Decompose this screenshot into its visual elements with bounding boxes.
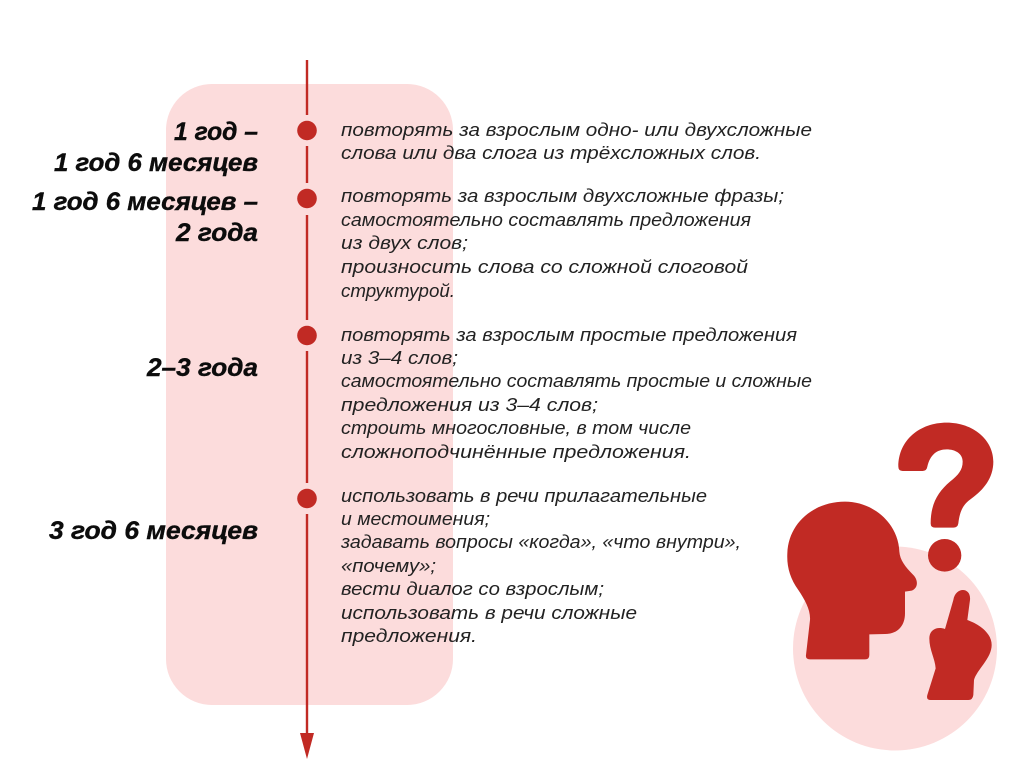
age label: 1 год 6 месяцев – 2 года: 2 года: [175, 219, 258, 247]
timeline markers: [297, 121, 317, 508]
age label: 2–3 года: 2–3 года: [146, 354, 258, 382]
text block: skills 2: произносить слова со сложной слоговой: [341, 256, 748, 277]
text block: skills 2: самостоятельно составлять предложения: [341, 209, 751, 230]
text block: skills 4: и местоимения;: [341, 508, 490, 529]
age label: 1 год 6 месяцев – 2 года: [32, 188, 258, 247]
age label: 1 год 6 месяцев – 2 года: 1 год 6 месяцев –: [32, 188, 258, 216]
text block: skills 3: сложноподчинённые предложения.: [341, 441, 691, 462]
text block: skills 2: структурой.: [341, 280, 455, 301]
icon: head with question mark and raised finger: [787, 423, 997, 750]
text block: skills 4: «почему»;: [341, 555, 436, 576]
text block: skills 3: строить многословные, в том числе: [341, 417, 691, 438]
age label: 1 год – 1 год 6 месяцев: 1 год 6 месяцев: [54, 149, 258, 177]
text block: skills 1: слова или два слога из трёхсложных слов.: [341, 142, 761, 163]
age label: 3 год 6 месяцев: 3 год 6 месяцев: [49, 517, 258, 545]
age label: 1 год – 1 год 6 месяцев: [54, 118, 258, 177]
text block: skills 3: [341, 324, 812, 462]
text block: skills 4: вести диалог со взрослым;: [341, 578, 604, 599]
text block: skills 4: [340, 485, 741, 646]
text block: skills 4: задавать вопросы «когда», «что внутри»,: [340, 531, 741, 552]
text block: skills 3: из 3–4 слов;: [341, 347, 458, 368]
panel: timeline background: [166, 84, 453, 705]
text block: skills 1: повторять за взрослым одно- или двухсложные: [341, 119, 812, 140]
text block: skills 4: использовать в речи прилагательные: [341, 485, 707, 506]
timeline arrow: [300, 60, 314, 759]
text block: skills 2: [341, 185, 784, 301]
text block: skills 3: повторять за взрослым простые предложения: [341, 324, 797, 345]
text block: skills 2: из двух слов;: [341, 232, 468, 253]
age label: 1 год – 1 год 6 месяцев: 1 год –: [174, 118, 258, 146]
text block: skills 1: [341, 119, 812, 163]
text block: skills 4: использовать в речи сложные: [341, 602, 637, 623]
text block: skills 3: предложения из 3–4 слов;: [341, 394, 598, 415]
text block: skills 4: предложения.: [341, 625, 477, 646]
text block: skills 2: повторять за взрослым двухсложные фразы;: [341, 185, 784, 206]
text block: skills 3: самостоятельно составлять простые и сложные: [341, 370, 812, 391]
